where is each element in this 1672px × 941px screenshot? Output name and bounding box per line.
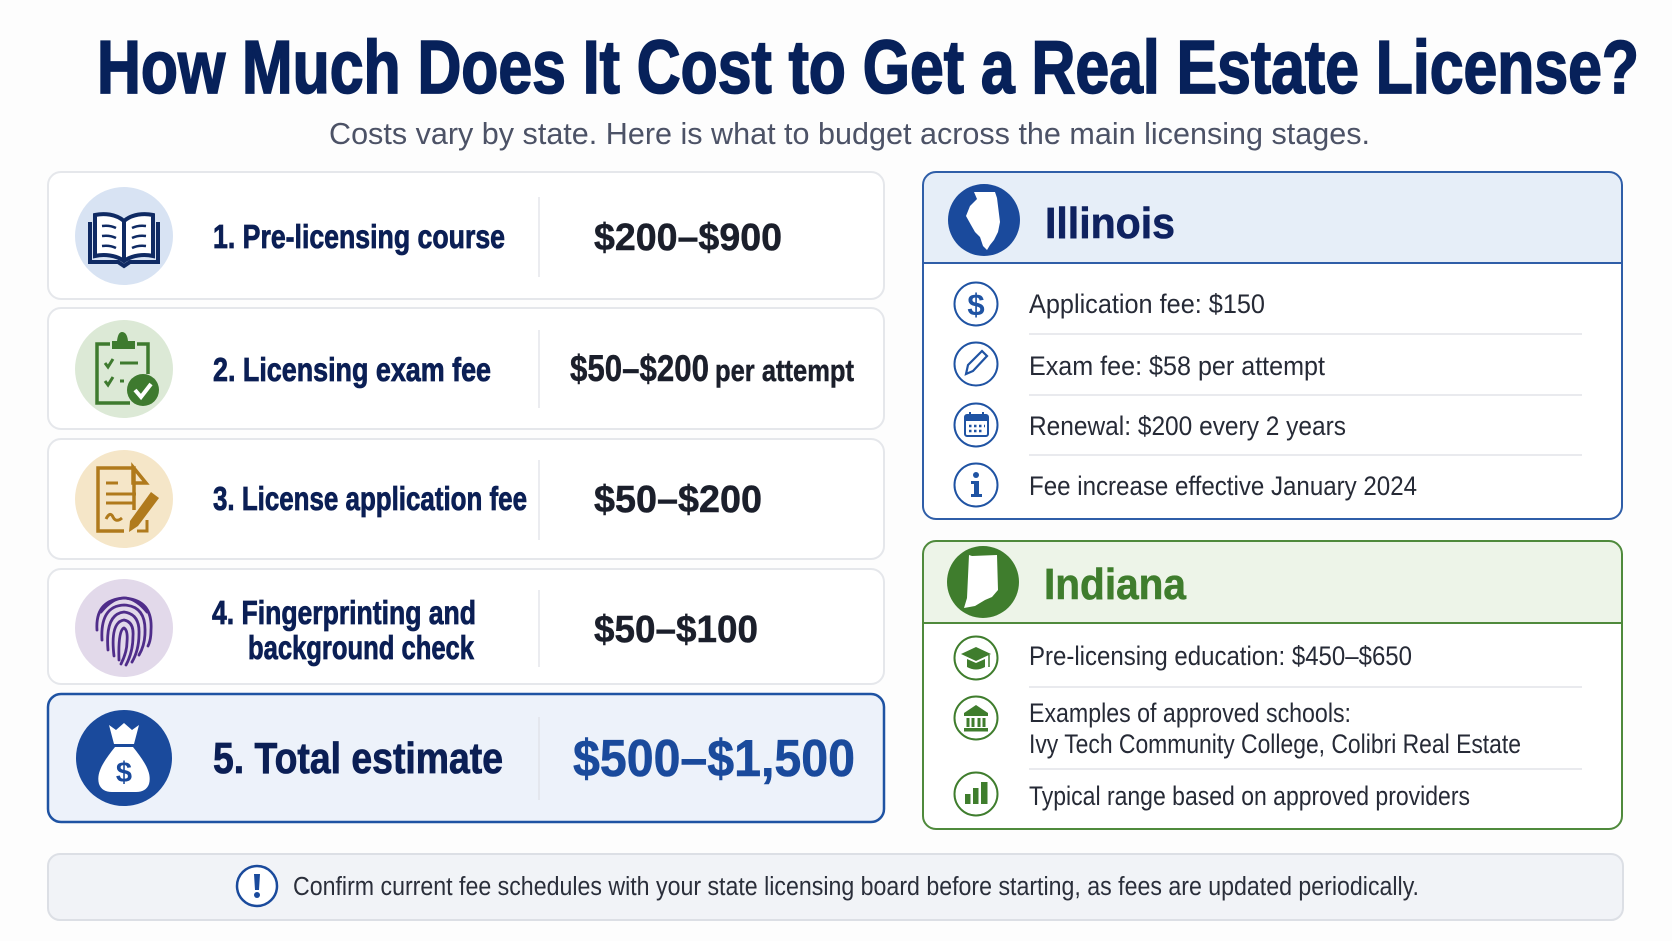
subtitle: Costs vary by state. Here is what to budget across the main licensing stages. <box>329 116 1370 151</box>
amount note: per attempt <box>715 353 854 388</box>
panel: cost stage 2 <box>48 308 884 429</box>
icon: Illinois state <box>948 184 1020 256</box>
icon: exclamation <box>237 866 277 906</box>
panel: cost stage 4 <box>48 569 884 684</box>
row: pre-licensing education: Pre-licensing education: $450–$650 <box>1029 641 1412 671</box>
callout: footer note <box>48 854 1623 920</box>
label <box>212 594 476 666</box>
icon: document and pencil <box>75 450 173 548</box>
row: approved schools: Examples of approved schools: <box>1029 698 1351 728</box>
amount: $50–$200 <box>570 348 709 389</box>
row: exam fee: Exam fee: $58 per attempt <box>1029 351 1325 381</box>
amount: $200–$900 <box>594 217 782 259</box>
panel: Illinois <box>923 172 1622 519</box>
row: typical range <box>954 772 1470 816</box>
amount: $500–$1,500 <box>573 730 855 788</box>
row: renewal <box>954 404 1346 446</box>
row: exam fee <box>954 342 1325 386</box>
icon: fingerprint <box>75 579 173 677</box>
label: 5. Total estimate <box>213 734 503 783</box>
amount: $50–$100 <box>594 609 758 651</box>
label: 3. License application fee <box>213 480 527 517</box>
icon: money bag: $ <box>116 757 132 789</box>
row: approved schools: Ivy Tech Community College, Colibri Real Estate <box>1029 729 1521 759</box>
row: application fee: $ <box>967 287 985 322</box>
row: pre-licensing education <box>954 636 1412 680</box>
row: fee increase <box>954 464 1417 506</box>
panel: total estimate <box>48 694 884 822</box>
label: background check <box>248 629 474 666</box>
icon: clipboard with check <box>75 320 173 418</box>
label: 1. Pre-licensing course <box>213 218 505 255</box>
state name: Indiana <box>1044 560 1186 609</box>
row: application fee <box>954 282 1265 326</box>
icon: money bag <box>76 710 172 806</box>
row: fee increase: Fee increase effective January 2024 <box>1029 471 1417 501</box>
icon: Indiana state <box>947 546 1019 618</box>
label: 2. Licensing exam fee <box>213 351 491 388</box>
row: typical range: Typical range based on approved providers <box>1029 781 1470 811</box>
panel: cost stage 3 <box>48 439 884 559</box>
panel: cost stage 1 <box>48 172 884 299</box>
row: renewal: Renewal: $200 every 2 years <box>1029 411 1346 441</box>
label: 4. Fingerprinting and <box>212 594 476 631</box>
icon: open book <box>75 187 173 285</box>
amount: $50–$200 <box>594 479 762 521</box>
note text: Confirm current fee schedules with your state licensing board before starting, as fees are updated periodically. <box>293 873 1419 901</box>
row: approved schools <box>954 696 1521 759</box>
state name: Illinois <box>1045 199 1175 248</box>
panel: Indiana <box>923 541 1622 829</box>
row: application fee: Application fee: $150 <box>1029 289 1265 319</box>
